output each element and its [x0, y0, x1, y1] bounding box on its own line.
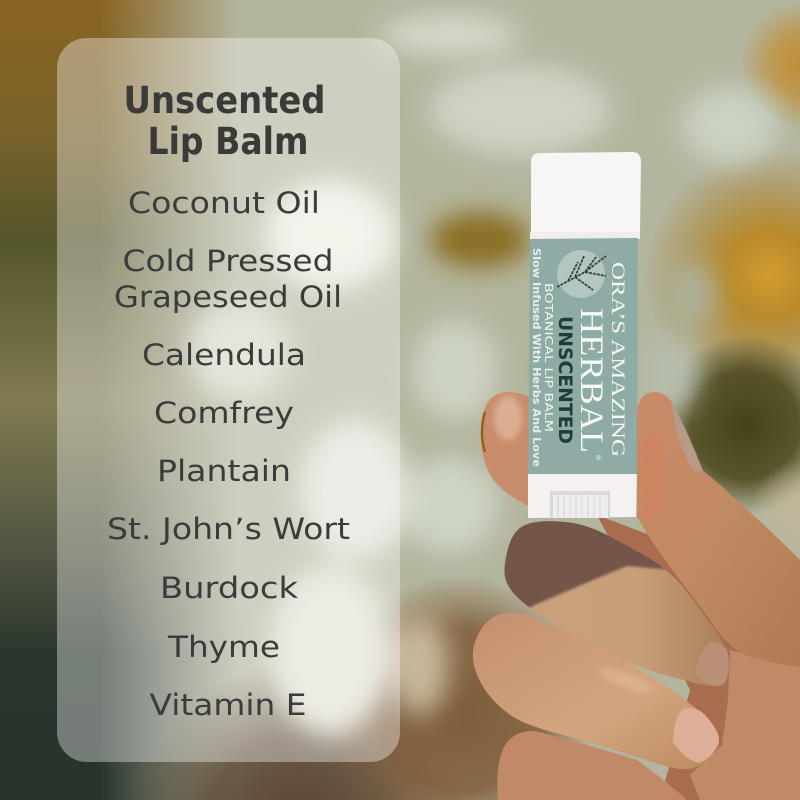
- ingredient list: Coconut Oil: [128, 186, 320, 220]
- hand: little finger: [497, 731, 687, 800]
- ingredient list: Calendula: [142, 338, 306, 372]
- heading: Unscented: [124, 79, 326, 122]
- label text: [530, 248, 628, 467]
- ingredient list: Grapeseed Oil: [114, 280, 342, 314]
- lip balm tube: [528, 152, 641, 518]
- hand: middle finger: [504, 521, 729, 686]
- hand: index finger behind the balm: [481, 392, 532, 508]
- label text: ORA’S AMAZING: [607, 262, 628, 457]
- hand: thumb: [637, 392, 800, 667]
- ingredient list: Burdock: [160, 571, 298, 605]
- heading: [124, 79, 326, 163]
- ingredient list: Thyme: [167, 630, 280, 664]
- hand: palm behind fingers: [597, 515, 800, 800]
- ingredient list: Vitamin E: [150, 688, 306, 722]
- label text: Slow Infused With Herbs And Love: [530, 248, 542, 467]
- ingredient list: Cold Pressed: [122, 244, 334, 278]
- ingredient list: Plantain: [157, 454, 291, 488]
- cap: [531, 152, 641, 232]
- heading: Lip Balm: [148, 120, 308, 163]
- label text: HERBAL: [573, 308, 609, 453]
- base with dial: [528, 474, 637, 518]
- hand: ring finger: [473, 612, 719, 769]
- green label: [528, 238, 638, 474]
- label text: ®: [594, 454, 602, 461]
- ingredient list: St. John’s Wort: [107, 512, 350, 546]
- icon: herb leaf circle: [557, 250, 606, 298]
- label text: BOTANICAL LIP BALM: [542, 283, 554, 432]
- ingredient list: Comfrey: [154, 396, 294, 430]
- panel: translucent ingredient card: [57, 38, 400, 762]
- label text: UNSCENTED: [554, 316, 576, 444]
- ingredient list: [107, 186, 350, 722]
